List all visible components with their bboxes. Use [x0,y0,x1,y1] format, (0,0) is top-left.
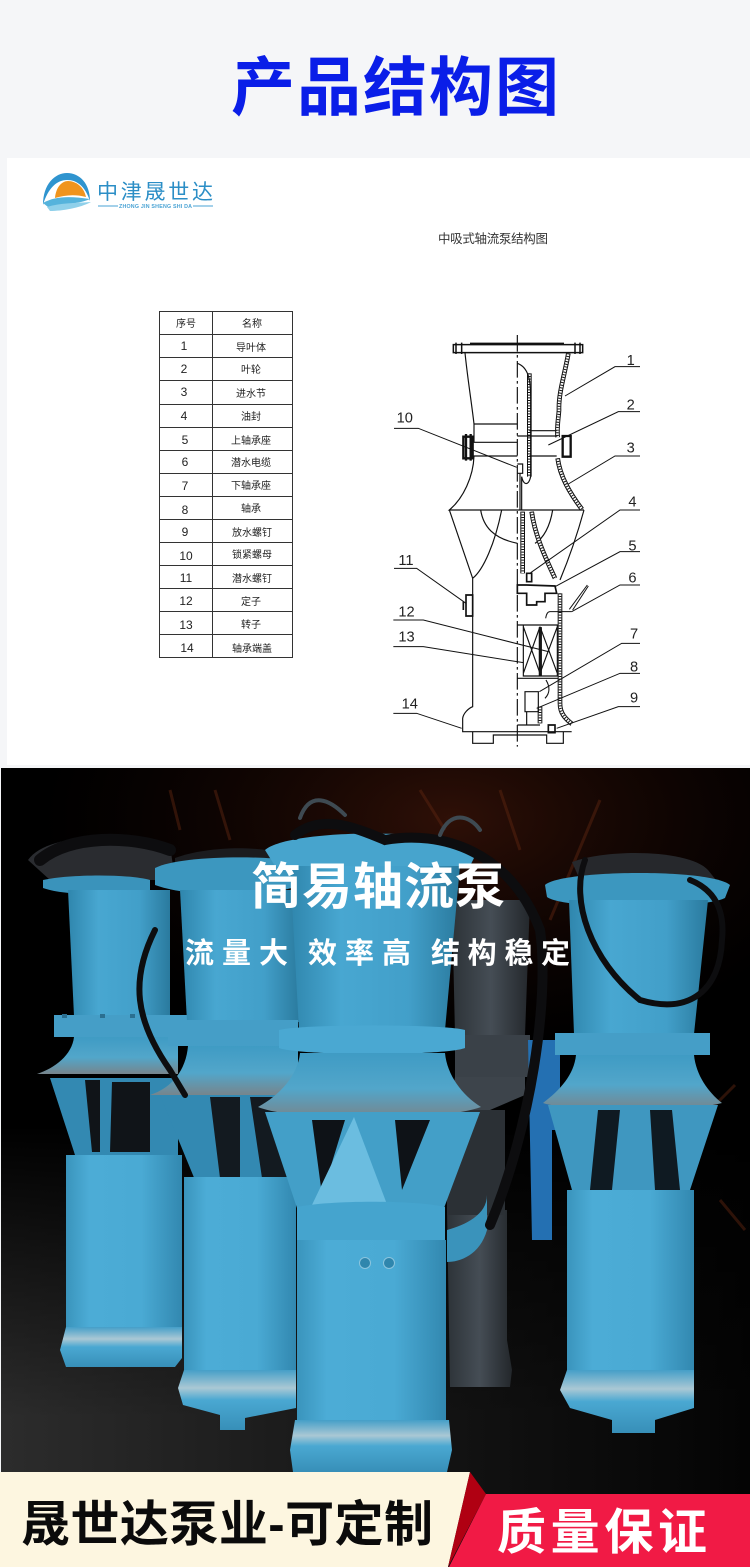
parts table: 定子 [241,595,261,608]
leader lines [393,367,640,728]
logo subtitle: ZHONG JIN SHENG SHI DA [119,204,192,210]
part number labels: 14 [402,696,418,712]
parts table: 导叶体 [236,342,266,354]
part number labels: 6 [628,571,636,587]
cream panel [0,1472,470,1567]
photo subhead [185,937,570,970]
parts table: 10 [179,549,193,563]
parts table: 上轴承座 [231,434,271,447]
inner components [517,363,588,733]
drawing title: 中吸式轴流泵结构图 [438,231,548,246]
small blue pipe behind [528,1040,560,1240]
bottom banner [0,1472,750,1567]
part number labels: 11 [398,553,414,569]
hatched walls [523,353,582,724]
pump: far left [28,837,189,1367]
pump cross-section diagram [393,335,640,747]
logo subtitle [98,204,213,210]
parts table: 叶轮 [241,363,261,376]
parts table: 名称 [242,317,262,330]
part number labels: 10 [397,411,413,427]
part number labels [397,353,638,712]
part number labels: 3 [627,441,635,457]
part number labels: 1 [627,353,635,369]
banner quality text: 质量保证 [497,1506,707,1560]
panel: structure drawing [7,158,750,765]
part number labels: 9 [630,691,638,707]
parts table: 1 [181,339,188,353]
photo subhead: 效率高 [308,937,411,970]
dark pump at back [447,900,530,1387]
outer outline [449,343,584,743]
parts table: 潜水电缆 [231,456,271,469]
parts table: 13 [179,618,193,632]
part number labels: 13 [398,630,415,646]
parts table: 转子 [241,618,261,631]
parts table [160,312,292,658]
logo name: 中津晟世达 [97,181,213,204]
logo [43,173,213,211]
red fold [448,1472,486,1567]
red panel [449,1494,750,1567]
parts table: 进水节 [236,388,266,400]
parts table: 放水螺钉 [232,526,272,539]
parts table: 潜水螺钉 [232,572,272,585]
part number labels: 5 [628,539,636,555]
pump: center front [258,834,487,1472]
pump: second from left [150,848,300,1430]
parts table: 油封 [241,410,261,423]
parts table: 3 [181,385,188,399]
parts table: 锁紧螺母 [232,548,272,561]
parts table: 序号 [176,317,196,330]
center line [516,335,519,747]
photo headline: 简易轴流泵 [251,859,505,915]
parts table: 5 [182,433,189,447]
part number labels: 7 [630,626,638,642]
parts table: 下轴承座 [231,479,271,492]
photo subhead: 流量大 [185,937,288,970]
parts table: 轴承端盖 [232,642,272,655]
parts table: 9 [182,525,189,539]
parts table: 11 [180,571,193,585]
parts table: 轴承 [241,502,261,515]
banner brand text: 晟世达泵业-可定制 [21,1498,433,1552]
parts table: 4 [181,409,188,423]
pump: right [543,853,730,1433]
part number labels: 8 [630,660,638,676]
part number labels: 12 [398,605,415,621]
parts table: 12 [179,594,193,608]
parts table: 14 [180,641,194,655]
part number labels: 2 [627,397,635,413]
cables [40,800,723,1225]
photo subhead: 结构稳定 [431,937,570,970]
part number labels: 4 [628,495,636,511]
parts table: 6 [182,455,189,469]
parts table: 2 [181,362,188,376]
icon: sun over waves [43,173,91,211]
title: 产品结构图 [231,52,559,124]
product photo: pumps on dark background [1,768,750,1567]
parts table: 8 [182,503,189,517]
parts table: 7 [182,479,189,493]
